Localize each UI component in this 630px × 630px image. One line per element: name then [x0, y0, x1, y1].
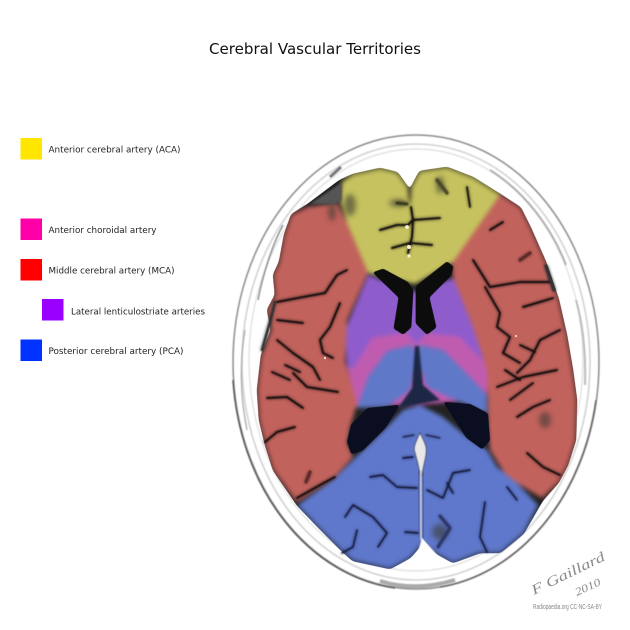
frontal and parietal shadows	[328, 176, 551, 540]
title: Cerebral Vascular Territories	[209, 40, 421, 58]
legend item: anterior cerebral artery	[20, 138, 180, 160]
midline falx and pineal	[414, 433, 440, 558]
legend item: middle cerebral artery: Middle cerebral artery (MCA)	[48, 266, 174, 276]
signature: F Gaillard	[528, 549, 609, 599]
occipital horn, right	[445, 403, 489, 448]
brain: vascular territories	[258, 168, 576, 568]
legend item: anterior cerebral artery: Anterior cerebral artery (ACA)	[48, 146, 180, 156]
territory: middle cerebral artery, right	[452, 195, 576, 498]
territory: anterior choroidal underlay	[347, 332, 488, 408]
legend item: anterior choroidal artery: Anterior choroidal artery	[48, 226, 156, 236]
left MCA sulci	[262, 270, 347, 498]
bright vessel dots	[324, 225, 517, 359]
territory: middle cerebral artery, left	[258, 203, 368, 502]
cortical sulci	[262, 180, 560, 553]
legend item: posterior cerebral artery	[20, 340, 184, 361]
legend item: posterior cerebral artery: Posterior cerebral artery (PCA)	[48, 347, 184, 357]
legend item: lateral lenticulostriate arteries	[42, 299, 206, 320]
attribution: Radiopaedia.org CC-NC-SA-BY	[533, 604, 602, 611]
legend item: middle cerebral artery	[20, 259, 174, 280]
PCA sulci	[342, 435, 517, 553]
skull outline	[233, 135, 599, 589]
territory: anterior cerebral artery	[340, 168, 500, 284]
signature: 2010	[573, 576, 603, 599]
occipital horn, left	[348, 406, 398, 453]
frontal horn, left	[375, 270, 412, 333]
grey frontal patch	[310, 183, 342, 204]
right MCA sulci	[473, 222, 560, 475]
ventricles and soft shadows	[310, 176, 551, 540]
central cistern	[398, 346, 440, 408]
brain base	[258, 168, 576, 568]
legend item: lateral lenticulostriate arteries: Lateral lenticulostriate arteries	[71, 308, 206, 318]
legend item: anterior choroidal artery	[20, 218, 156, 240]
signature	[528, 549, 609, 599]
legend	[20, 138, 206, 361]
territory: posterior cerebral, occipital	[298, 405, 538, 568]
territory: posterior cerebral, thalami	[357, 345, 487, 414]
territory: lenticulostriate underlay	[345, 275, 487, 368]
ACA sulci	[380, 180, 470, 253]
frontal horn, right	[417, 263, 452, 333]
